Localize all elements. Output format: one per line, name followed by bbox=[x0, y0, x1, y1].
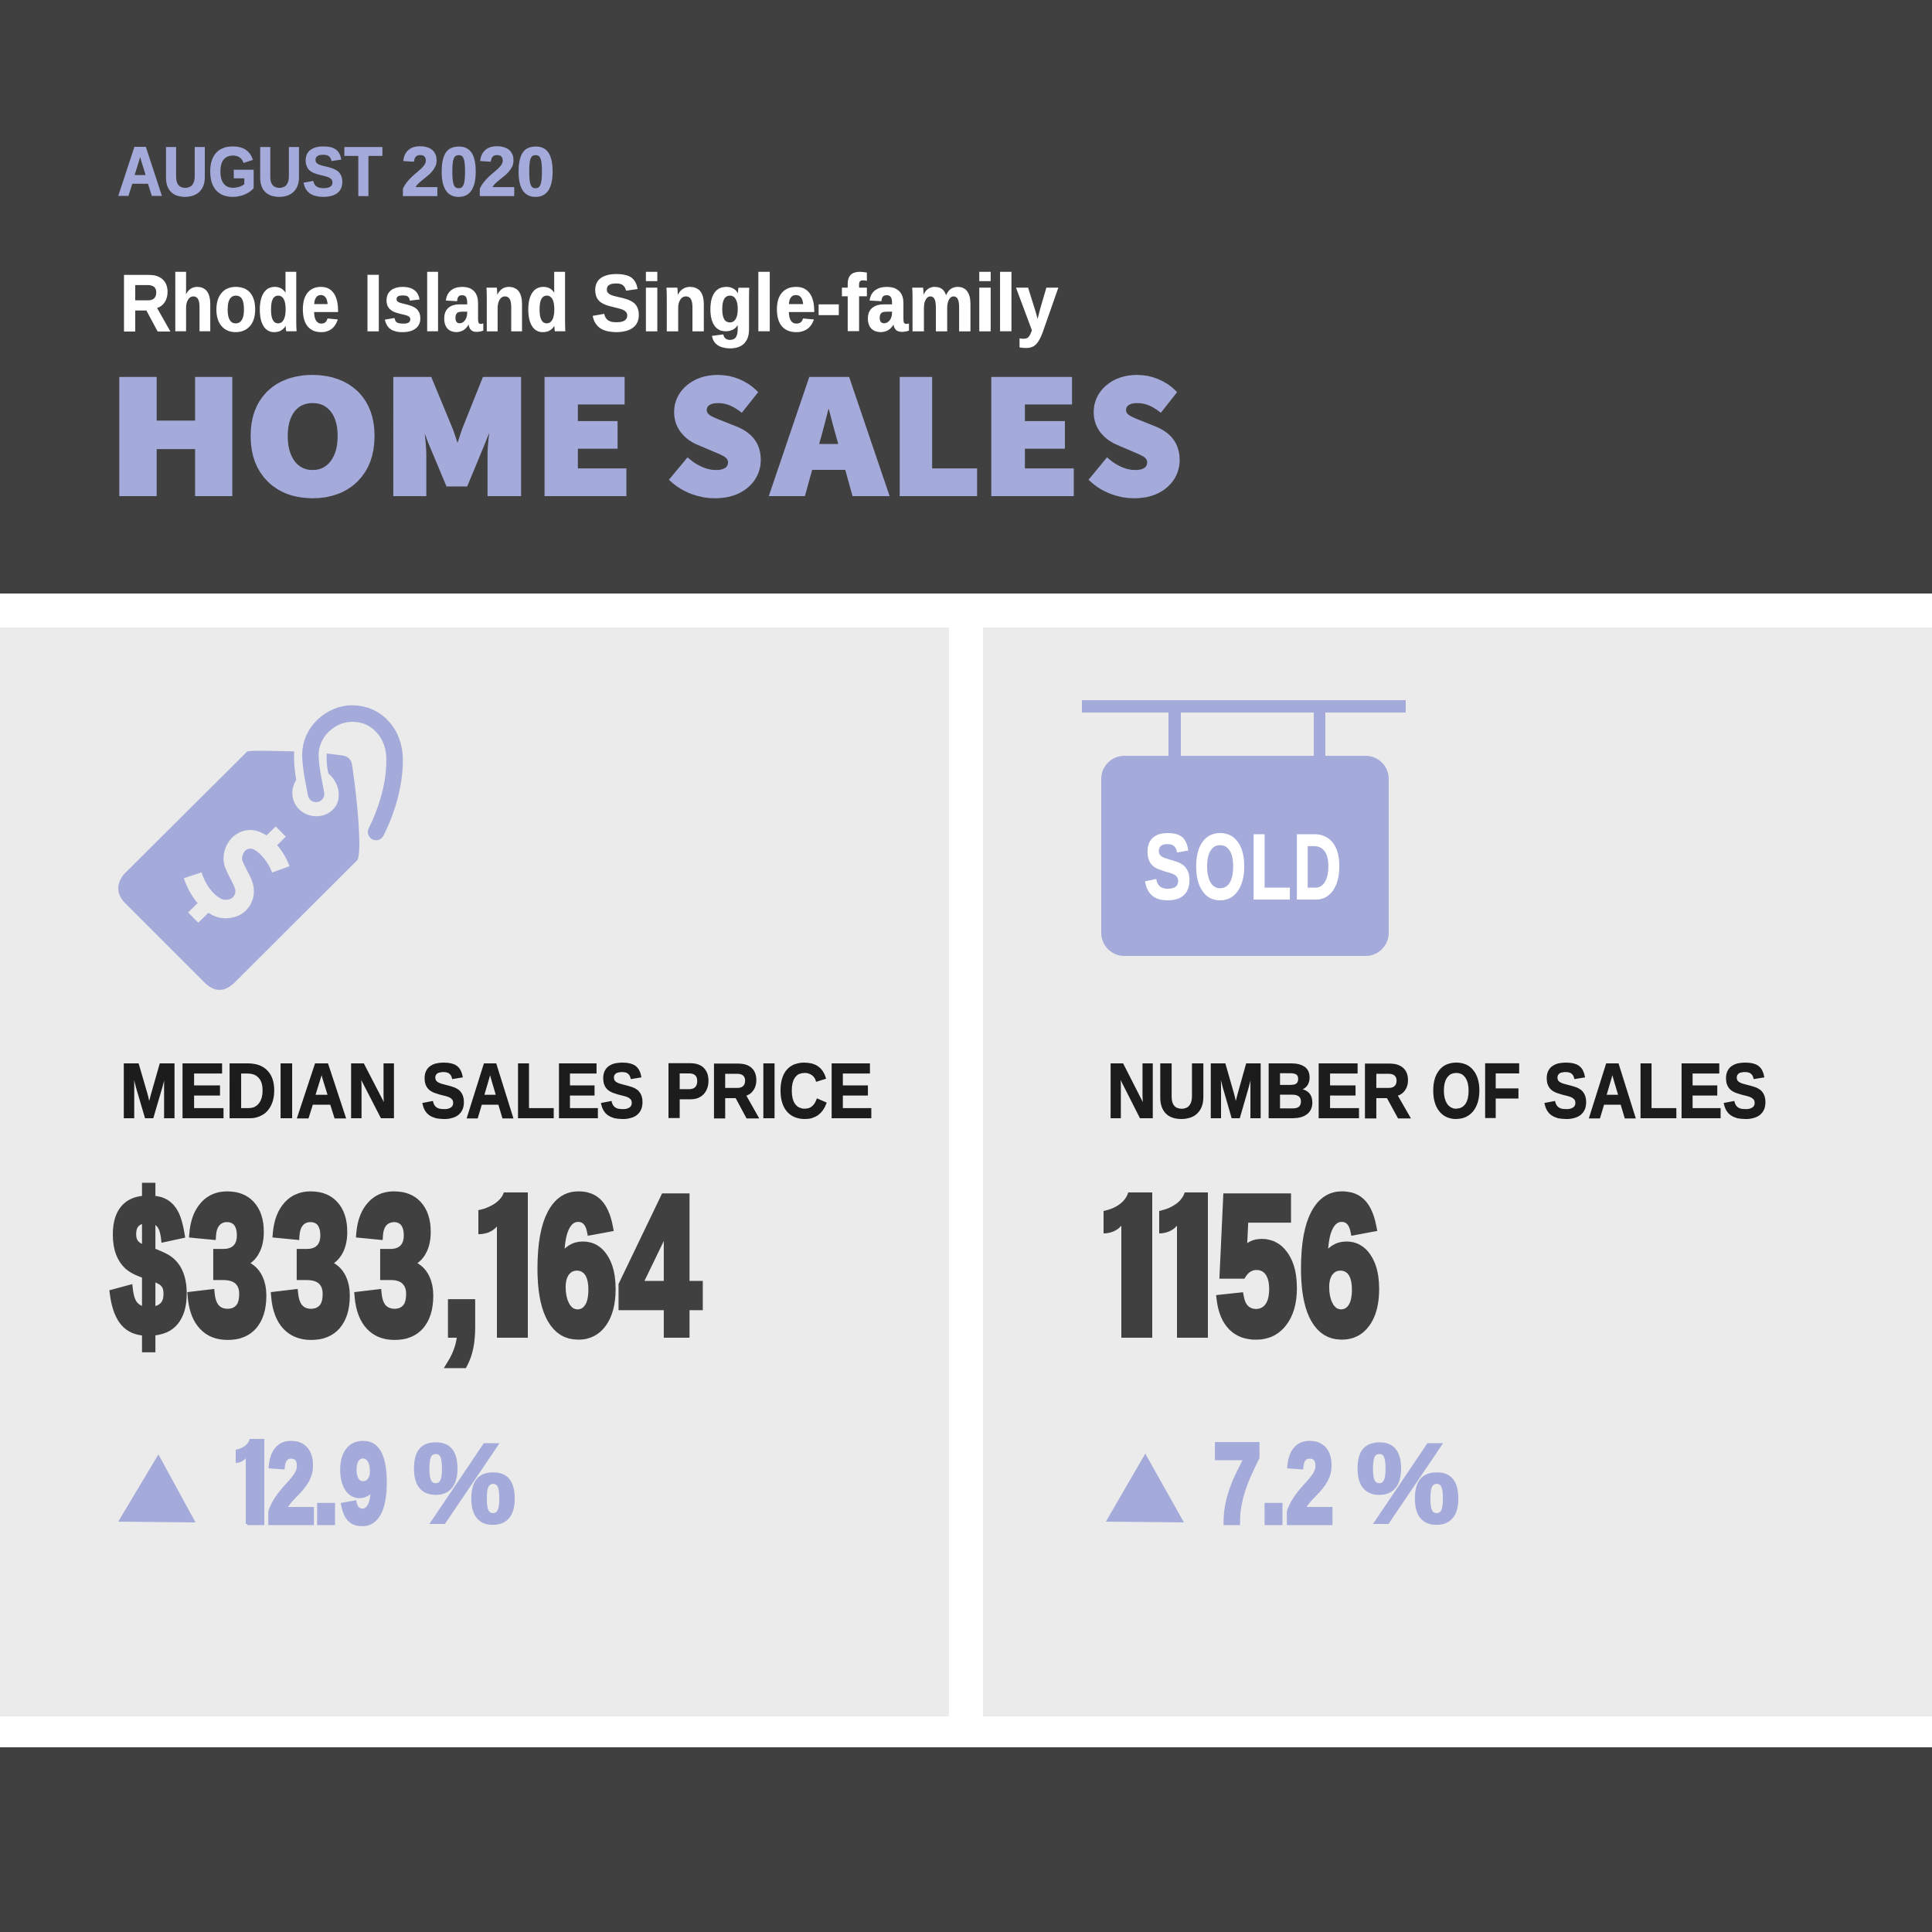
change: median sales price: 9 bbox=[339, 1420, 388, 1546]
label: median sales price: MEDIAN bbox=[120, 1048, 398, 1134]
title: E bbox=[980, 316, 1081, 539]
value: median sales price: 3 bbox=[355, 1155, 435, 1375]
change: number of sales: . bbox=[1260, 1420, 1287, 1546]
change: median sales price: % bbox=[413, 1420, 516, 1546]
value: number of sales bbox=[1094, 1155, 1381, 1375]
date heading: 2020 bbox=[401, 134, 555, 211]
title: A bbox=[772, 316, 886, 539]
change: median sales price bbox=[229, 1420, 516, 1546]
label: median sales price: PRICE bbox=[665, 1048, 873, 1134]
glyph correction: footless 1 bbox=[1094, 1182, 1215, 1349]
change: median sales price: . bbox=[313, 1420, 339, 1546]
value: median sales price: $ bbox=[111, 1155, 185, 1375]
value: number of sales: 6 bbox=[1299, 1155, 1381, 1375]
icon: sold sign: S bbox=[1144, 815, 1192, 919]
icon: sold sign bbox=[1082, 700, 1406, 956]
subtitle: Rhode bbox=[120, 259, 340, 349]
subtitle: Island bbox=[363, 259, 570, 349]
change: number of sales: 7 bbox=[1213, 1420, 1261, 1546]
value: number of sales: 1 bbox=[1159, 1155, 1213, 1375]
icon: up triangle bbox=[1106, 1454, 1184, 1522]
title: H bbox=[107, 316, 245, 539]
value: median sales price: , bbox=[441, 1155, 481, 1375]
value: median sales price: 6 bbox=[536, 1155, 617, 1375]
change: number of sales: 2 bbox=[1286, 1420, 1334, 1546]
panel: median sales price bbox=[0, 628, 949, 1716]
label: number of sales: OF bbox=[1431, 1048, 1521, 1134]
change: number of sales: % bbox=[1356, 1420, 1460, 1546]
label: number of sales: NUMBER bbox=[1107, 1048, 1411, 1134]
value: number of sales: 1 bbox=[1104, 1155, 1158, 1375]
title: S bbox=[666, 316, 764, 539]
icon: sold sign: D bbox=[1293, 815, 1342, 919]
panel: footer band bbox=[0, 1747, 1932, 1932]
glyph correction: footless 1 bbox=[229, 1430, 267, 1534]
date heading: AUGUST bbox=[117, 134, 383, 211]
icon: sold sign: L bbox=[1250, 815, 1291, 919]
change: median sales price: 2 bbox=[267, 1420, 315, 1546]
value: median sales price: 3 bbox=[188, 1155, 268, 1375]
icon: price tag bbox=[118, 713, 395, 990]
value: median sales price: 3 bbox=[271, 1155, 352, 1375]
value: median sales price: 4 bbox=[620, 1155, 700, 1375]
panel: number of sales bbox=[983, 628, 1932, 1716]
icon: up triangle bbox=[118, 1454, 196, 1522]
label: number of sales: SALES bbox=[1543, 1048, 1767, 1134]
label: median sales price: SALES bbox=[421, 1048, 645, 1134]
value: median sales price: 1 bbox=[478, 1155, 532, 1375]
value: number of sales: 5 bbox=[1216, 1155, 1298, 1375]
panel: header band bbox=[0, 0, 1932, 594]
title: M bbox=[381, 316, 533, 539]
icon: sold sign: O bbox=[1194, 815, 1247, 919]
title: L bbox=[889, 316, 981, 539]
title: S bbox=[1086, 316, 1183, 539]
title: E bbox=[533, 316, 634, 539]
glyph correction: footless 1 bbox=[476, 1182, 536, 1349]
subtitle: Single-family bbox=[591, 259, 1058, 349]
value: median sales price bbox=[111, 1155, 700, 1375]
title: O bbox=[244, 316, 381, 539]
change: median sales price: 1 bbox=[234, 1420, 267, 1546]
